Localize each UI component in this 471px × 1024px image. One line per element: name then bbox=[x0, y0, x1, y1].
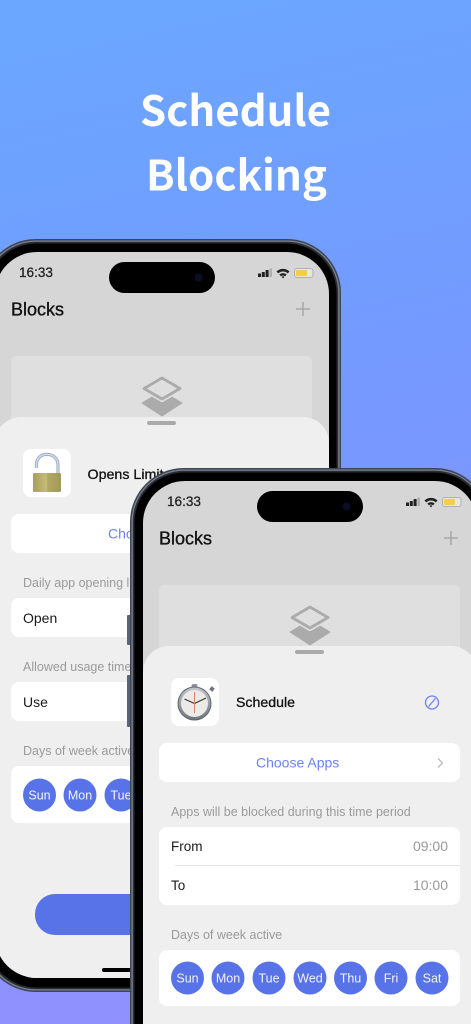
days row: Mon bbox=[216, 972, 240, 986]
heading: Blocks: Blocks bbox=[159, 528, 212, 548]
from/to card: From bbox=[171, 839, 202, 854]
sheet title: Opens Limit bbox=[88, 466, 164, 482]
days row: Mon bbox=[68, 788, 92, 802]
use row: Use bbox=[23, 694, 48, 710]
from/to card: 09:00 bbox=[413, 838, 448, 854]
open row: Open bbox=[23, 610, 57, 626]
home indicator bbox=[102, 968, 130, 972]
days row: Tue bbox=[258, 972, 280, 986]
empty card bbox=[159, 585, 460, 648]
from/to card bbox=[159, 827, 460, 905]
primary button bbox=[35, 894, 130, 935]
choose apps row: Choose Apps bbox=[108, 526, 191, 542]
days row: Sat bbox=[423, 972, 442, 986]
status bar bbox=[167, 491, 461, 522]
use row bbox=[11, 682, 127, 721]
days row: Fri bbox=[384, 972, 398, 986]
heading: Blocks: Blocks bbox=[11, 300, 64, 320]
title: Schedule bbox=[140, 78, 331, 139]
icon: prohibit bbox=[426, 696, 438, 709]
choose apps row: Choose Apps bbox=[256, 754, 339, 770]
sheet title: Schedule bbox=[236, 694, 295, 710]
side buttons bbox=[127, 615, 131, 727]
phone: opens limit screen bbox=[0, 239, 341, 992]
icon: layers bbox=[290, 607, 330, 645]
days row: Tue bbox=[110, 788, 132, 802]
days row: Thu bbox=[340, 972, 361, 986]
days label: Days of week active bbox=[171, 928, 282, 942]
phone frame bbox=[0, 239, 341, 992]
phone frame bbox=[130, 468, 471, 1024]
bottom sheet bbox=[143, 646, 471, 1024]
usage label: Allowed usage time bbox=[23, 660, 131, 674]
empty card bbox=[11, 356, 312, 418]
title bbox=[140, 78, 331, 204]
days row: Wed bbox=[297, 972, 323, 986]
icon: plus bbox=[444, 531, 458, 545]
screen bbox=[0, 252, 329, 987]
days label: Days of week active bbox=[23, 744, 134, 758]
icon: open padlock bbox=[23, 449, 71, 497]
days row bbox=[11, 766, 130, 823]
icon: plus bbox=[296, 302, 310, 316]
icon: stopwatch bbox=[171, 678, 219, 726]
choose apps row bbox=[159, 743, 460, 782]
phone: schedule screen bbox=[127, 468, 471, 1024]
status bar: 16:33 bbox=[19, 265, 53, 280]
daily limit label: Daily app opening limit bbox=[23, 576, 149, 590]
status bar bbox=[19, 262, 313, 293]
icon: layers bbox=[142, 378, 182, 416]
from/to card: 10:00 bbox=[413, 877, 448, 893]
bottom sheet bbox=[0, 417, 329, 987]
days row: Sun bbox=[28, 788, 51, 802]
from/to card: To bbox=[171, 878, 185, 893]
choose apps row bbox=[11, 514, 130, 553]
status bar: 16:33 bbox=[167, 494, 201, 509]
open row bbox=[11, 598, 130, 637]
title: Blocking bbox=[146, 142, 327, 204]
days row bbox=[159, 950, 460, 1006]
screen bbox=[143, 481, 471, 1024]
time period label: Apps will be blocked during this time period bbox=[171, 805, 411, 819]
days row: Sun bbox=[176, 972, 199, 986]
